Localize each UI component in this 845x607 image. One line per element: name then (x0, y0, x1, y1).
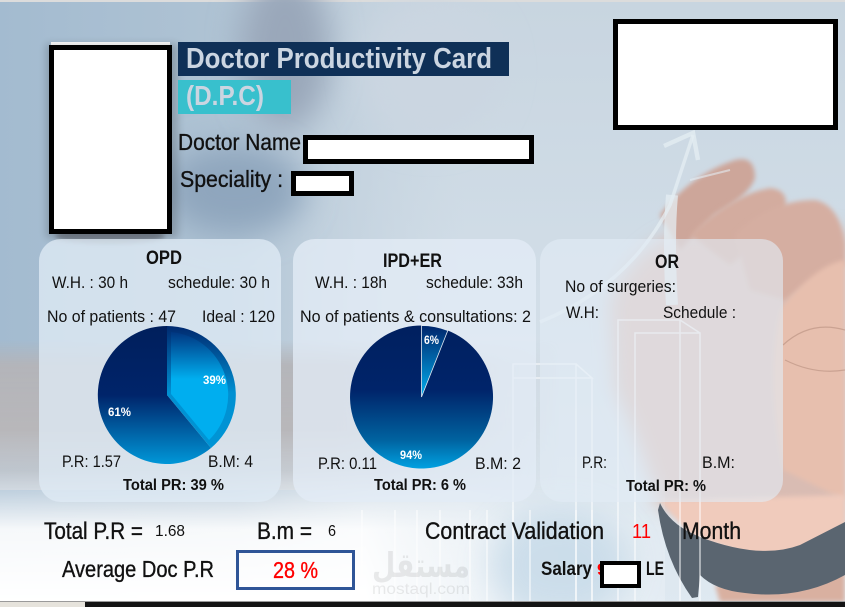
pie chart: OPD 39% / 61%: 39% (203, 373, 226, 387)
pie chart: IPD 6% / 94%: 94% (400, 448, 422, 462)
logo placeholder (616, 22, 836, 128)
speciality field: Speciality : (180, 166, 283, 192)
OPD working hours: W.H. : 30 h (52, 274, 128, 292)
panel: IPD+ER (293, 239, 536, 502)
panel: OPD (39, 239, 281, 502)
average doc P.R value box: 28 % (273, 557, 318, 583)
white fade at bottom (0, 479, 512, 601)
contract validation: Contract Validation (425, 518, 604, 545)
OR B.M: B.M: (702, 454, 735, 472)
header: photo placeholder (46, 42, 178, 238)
bottom window edge (0, 601, 845, 607)
OR P.R: P.R: (582, 454, 607, 472)
pen and rising arrow (540, 133, 730, 322)
OR schedule: Schedule : (663, 304, 736, 322)
average doc P.R value box (238, 552, 354, 588)
pie chart: IPD 6% / 94% (350, 326, 493, 469)
OPD total PR: Total PR: 39 % (123, 477, 224, 494)
speciality field (180, 166, 352, 194)
salary (541, 559, 664, 586)
IPD schedule: schedule: 33h (426, 274, 523, 292)
OR working hours: W.H: (566, 304, 599, 322)
contract validation: Month (682, 518, 741, 545)
pie chart: IPD 6% / 94%: 6% (424, 333, 439, 347)
watermark: mostaql.com (372, 581, 470, 598)
OR heading: OR (655, 252, 679, 273)
IPD heading: IPD+ER (383, 251, 442, 272)
contract validation: 11 (632, 521, 651, 543)
hand: palm and wrist (610, 230, 845, 530)
title: Doctor Productivity Card: Doctor Productivity Card (186, 43, 492, 75)
watch strap (658, 503, 845, 598)
panel: OR (540, 239, 783, 502)
total P.R summary: Total P.R = (44, 518, 143, 545)
average doc P.R label: Average Doc P.R (62, 556, 214, 582)
salary: Salary (541, 559, 592, 580)
watermark (372, 546, 470, 598)
pie chart: OPD 39% / 61% (98, 326, 236, 464)
OPD patients: No of patients : 47 (47, 308, 176, 326)
IPD patients and consultations: No of patients & consultations: 2 (300, 308, 531, 326)
OPD schedule: schedule: 30 h (168, 274, 270, 292)
OPD P.R: P.R: 1.57 (62, 453, 121, 471)
hand: fingers (660, 159, 755, 250)
IPD B.M: B.M: 2 (475, 455, 521, 473)
OR number of surgeries: No of surgeries: (565, 278, 676, 296)
salary: 9 (597, 560, 606, 579)
OR total PR: Total PR: % (626, 478, 706, 495)
subtitle: D.P.C: (D.P.C) (186, 80, 264, 111)
contract validation (425, 518, 741, 545)
salary: LE (646, 559, 664, 580)
pie chart: OPD 39% / 61%: 61% (108, 405, 131, 419)
B.m summary: B.m = (257, 518, 312, 545)
total P.R summary: 1.68 (155, 523, 185, 540)
OPD B.M: B.M: 4 (208, 453, 253, 471)
IPD working hours: W.H. : 18h (315, 274, 387, 292)
doctor name field: Doctor Name (178, 129, 301, 155)
B.m summary: 6 (328, 523, 336, 540)
OPD heading: OPD (146, 248, 182, 269)
OPD ideal: Ideal : 120 (202, 308, 275, 326)
IPD total PR: Total PR: 6 % (374, 477, 466, 494)
watermark: مستقل (372, 546, 470, 586)
doctor name field (178, 129, 532, 162)
IPD P.R: P.R: 0.11 (318, 455, 377, 473)
